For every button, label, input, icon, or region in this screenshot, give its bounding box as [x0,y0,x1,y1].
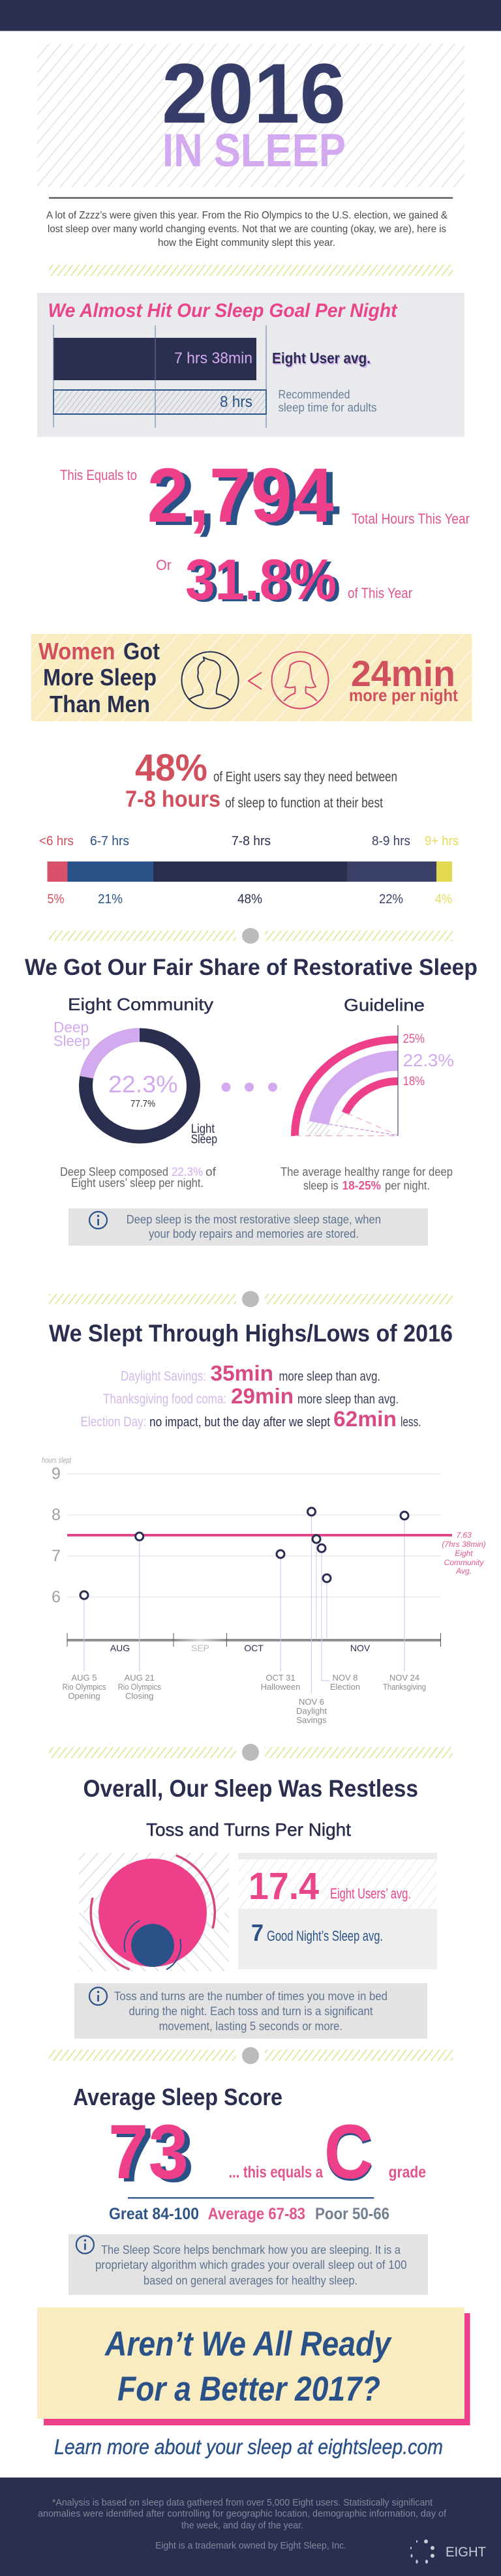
bar labels: 9+ hrs [425,834,459,848]
stat: score 73 grade C: 73 [108,2109,189,2195]
info box: sleep score [68,2234,428,2295]
donut values: 77.7% [130,1098,155,1109]
logo: eight [410,2539,486,2564]
y axis numbers: 9 [52,1465,61,1483]
heading: women got more sleep than men: Than Men [50,691,150,717]
arc labels [403,1032,454,1088]
icon: man [181,652,239,708]
heading: women got more sleep than men: Women [38,638,115,665]
event labels: Rio Olympics [63,1682,106,1692]
stat: 48% need 7-8 hours: of Eight users say they need between [213,770,397,785]
highlights: sleep change events: no impact, but the day after we slept [149,1415,330,1430]
logo: eight: EIGHT [446,2545,486,2560]
stat: 48% need 7-8 hours: 48% [135,747,207,789]
stat: 24min: more per night [349,685,458,705]
footnote text: the week, and day of the year. [181,2520,303,2531]
info text: Toss and turns are the number of times you move in bed [114,1990,387,2003]
event labels: Closing [125,1691,153,1701]
label: recommended sleep time [278,388,377,414]
cta text [104,2325,392,2408]
footnote text: anomalies were identified after controlling for geographic location, demographic information, day of [38,2508,447,2519]
bar: eight user average [53,338,256,380]
caption: healthy range: 18-25% [342,1179,381,1192]
average label: 7.63 [456,1531,472,1540]
heading: restless: Overall, Our Sleep Was Restless [84,1775,418,1802]
panel: eight community donut: Eight Community [68,995,213,1014]
event labels: Election [330,1682,360,1692]
link text: Learn more about your sleep at eightsleep.com [54,2435,443,2459]
highlights: sleep change events [81,1361,421,1431]
event labels: Rio Olympics [118,1682,161,1692]
drop lines [84,1512,404,1694]
info text: movement, lasting 5 seconds or more. [159,2020,342,2033]
stat: score 73 grade C: C [324,2111,374,2197]
info text: The Sleep Score helps benchmark how you are sleeping. It is a [101,2243,401,2256]
bar: recommended [53,390,266,414]
bar labels [39,834,459,848]
score ranges legend [109,2205,389,2223]
caption: healthy range: The average healthy range for deep [281,1165,453,1178]
bar labels: 6-7 hrs [90,834,129,848]
stat: 17.4 [249,1865,411,1908]
icon: woman [271,652,329,708]
highlights: sleep change events: Daylight Savings: [121,1369,206,1384]
info box: deep sleep [68,1208,428,1246]
bar labels: 8-9 hrs [372,834,410,848]
heading: sleep goal: We Almost Hit Our Sleep Goal Per Night [48,300,398,322]
caption: deep sleep composed: of [205,1165,217,1178]
footnote text: Eight is a trademark owned by Eight Sleep, Inc. [155,2540,346,2551]
donut values [108,1071,177,1109]
arc chart [295,1025,398,1136]
average label: Avg. [455,1566,472,1576]
intro text: A lot of Zzzz’s were given this year. From the Rio Olympics to the U.S. election, we gained & [46,210,448,221]
event labels: Opening [68,1691,100,1701]
x axis [67,1633,441,1653]
event labels: OCT 31 [266,1673,296,1683]
stat: 7: Good Night’s Sleep avg. [267,1928,383,1944]
bar labels: 7-8 hrs [232,834,271,848]
label: recommended sleep time: Recommended [278,388,350,401]
label: eight user avg: Eight User avg. [273,351,372,368]
stat: 17.4: 17.4 [249,1865,319,1908]
bar percentages: 4% [435,892,452,906]
event labels: Halloween [261,1682,300,1692]
stat: 31.8% of year: 31.8% [185,547,337,612]
bar segments [47,861,452,882]
icon: info [89,1988,107,2005]
event labels: NOV 6 [299,1697,324,1707]
event labels: NOV 24 [389,1673,419,1683]
stat: score 73 grade C: 73 [114,2112,194,2198]
subheading: toss and turns: Toss and Turns Per Night [146,1820,351,1840]
label: eight user avg: Eight User avg. [272,350,371,367]
score ranges legend: Poor 50-66 [315,2205,389,2223]
average label: Eight [455,1549,473,1558]
title block [37,44,464,187]
highlights: sleep change events: more sleep than avg. [297,1392,399,1407]
panel: sleep goal per night [37,293,464,437]
stat: 2,794 total hours: 2,794 [153,456,340,542]
stat: 17.4: Eight Users’ avg. [330,1885,411,1902]
average line [67,1534,452,1536]
x axis: OCT [244,1643,264,1653]
stat: 48% need 7-8 hours: 7-8 hours [125,786,220,812]
caption: deep sleep composed [60,1165,217,1190]
label: light sleep: Light [191,1122,215,1136]
stat: 31.8% of year: Or [156,557,172,573]
arc labels: 25% [403,1032,425,1046]
stacked bar chart: hours needed [39,834,459,906]
event labels: AUG 21 [125,1673,155,1683]
icon: info [76,2236,94,2254]
title: in sleep: IN SLEEP [162,125,346,177]
icon: info [89,1212,107,1229]
stat: 31.8% of year: 31.8% [189,549,341,614]
stat: 7: 7 [251,1919,264,1946]
title: 2016: 2016 [162,46,346,141]
chart: hours slept timeline: hours slept [42,1456,72,1465]
info text [95,2243,407,2287]
label: deep sleep: Sleep [53,1032,90,1049]
chart: hours slept timeline [42,1456,486,1725]
info text: based on general averages for healthy sleep. [144,2274,357,2287]
donut chart [86,1035,193,1137]
icon: less than [249,672,262,689]
stat: score 73 grade C: ... this equals a [228,2163,324,2181]
highlights: sleep change events: 62min [333,1407,397,1431]
highlights: sleep change events: 29min [231,1384,294,1408]
event labels: Daylight [296,1706,327,1716]
caption: deep sleep composed: Eight users’ sleep per night. [71,1176,204,1190]
x axis: AUG [110,1643,130,1653]
info text: during the night. Each toss and turn is a significant [129,2005,373,2018]
panel: guideline arcs [281,995,454,1192]
bar: eight user average: 7 hrs 38min [174,350,252,367]
intro text [46,210,448,248]
caption: deep sleep composed: 22.3% [172,1165,203,1178]
stat: 2,794 total hours: This Equals to [60,467,137,483]
y axis numbers: 7 [52,1547,61,1565]
info text: Deep sleep is the most restorative sleep stage, when [127,1213,381,1226]
score ranges legend: Great 84-100 [109,2205,199,2223]
heading: women got more sleep than men: Got [123,638,160,665]
cta text: For a Better 2017? [117,2370,380,2408]
heading: average sleep score: Average Sleep Score [73,2084,282,2110]
caption: deep sleep composed: Deep Sleep composed [60,1165,168,1178]
stat: 2,794 total hours: Total Hours This Year [352,511,470,527]
stat: score 73 grade C: grade [389,2163,426,2181]
y axis numbers [52,1465,61,1606]
event labels: AUG 5 [71,1673,97,1683]
stat: score 73 grade C: C [324,2109,373,2195]
bar percentages: 21% [98,892,123,906]
event labels: Thanksgiving [383,1682,426,1692]
caption: healthy range: per night. [385,1179,430,1192]
panel: call to action [37,2307,470,2425]
heading: women got more sleep than men: More Sleep [43,664,157,691]
label: light sleep [191,1122,217,1146]
highlights: sleep change events: 35min [210,1361,273,1385]
panel: toss and turn stats [238,1853,437,1969]
stat: 7 [251,1919,383,1946]
arc labels: 18% [403,1075,425,1088]
label: deep sleep: Deep [53,1019,89,1036]
x axis: SEP [191,1643,209,1653]
intro text: how the Eight community slept this year. [158,237,335,248]
bar percentages [47,892,452,906]
bar labels: <6 hrs [39,834,74,848]
bar percentages: 5% [47,892,65,906]
highlights: sleep change events: more sleep than avg. [279,1370,380,1384]
info box: toss and turns [74,1983,427,2039]
intro text: lost sleep over many world changing events. Not that we are counting (okay, we are), here is [48,224,446,235]
average label: Community [444,1558,484,1567]
panel: women vs men [31,634,472,721]
stat: 2,794 total hours [60,453,470,542]
panel: eight community donut [53,995,217,1190]
label: light sleep: Sleep [191,1133,217,1146]
header bar [0,0,501,31]
event labels: NOV 8 [332,1673,358,1683]
stat: 31.8% of year [156,547,412,614]
stat: score 73 grade C [108,2109,426,2198]
info text: your body repairs and memories are stored. [149,1227,359,1240]
icon: three dots [222,1083,277,1092]
bar percentages: 48% [237,892,262,906]
donut values: 22.3% [108,1071,177,1098]
footer [0,2478,501,2576]
y axis numbers: 8 [52,1506,61,1524]
heading: highs and lows: We Slept Through Highs/Lows of 2016 [49,1320,453,1347]
x axis: NOV [350,1643,371,1653]
caption: healthy range [281,1165,453,1192]
stat: 31.8% of year: of This Year [348,585,412,601]
caption: healthy range: sleep is [303,1179,339,1192]
chart: toss and turn circles [79,1853,229,1971]
heading: restorative sleep: We Got Our Fair Share of Restorative Sleep [25,955,478,980]
data points [80,1508,408,1599]
y axis numbers: 6 [52,1588,61,1606]
info text [114,1990,387,2033]
label: recommended sleep time: sleep time for adults [278,401,377,414]
event labels: Savings [296,1715,327,1725]
highlights: sleep change events: Election Day: [81,1415,146,1430]
average label: (7hrs 38min) [442,1540,486,1549]
cta text: Aren’t We All Ready [104,2325,392,2363]
footnote text [38,2497,447,2551]
stat: 48% need 7-8 hours: of sleep to function at their best [225,796,383,811]
info text: proprietary algorithm which grades your overall sleep out of 100 [95,2258,407,2271]
highlights: sleep change events: Thanksgiving food coma: [103,1392,226,1407]
stat: 48% need 7-8 hours [125,747,397,812]
stat: 24min: 24min [351,653,455,694]
bar percentages: 22% [379,892,403,906]
footnote text: *Analysis is based on sleep data gathered from over 5,000 Eight users. Statistically significant [52,2497,433,2508]
score ranges legend: Average 67-83 [208,2205,305,2223]
label: deep sleep [53,1019,90,1049]
bar: recommended: 8 hrs [220,393,252,411]
average label [442,1531,486,1576]
info text [127,1213,381,1240]
heading: women got more sleep than men [38,638,160,717]
event labels [63,1673,426,1725]
stat: 2,794 total hours: 2,794 [147,453,334,539]
arc labels: 22.3% [403,1051,454,1070]
highlights: sleep change events: less. [401,1415,421,1430]
panel: guideline arcs: Guideline [344,995,425,1015]
